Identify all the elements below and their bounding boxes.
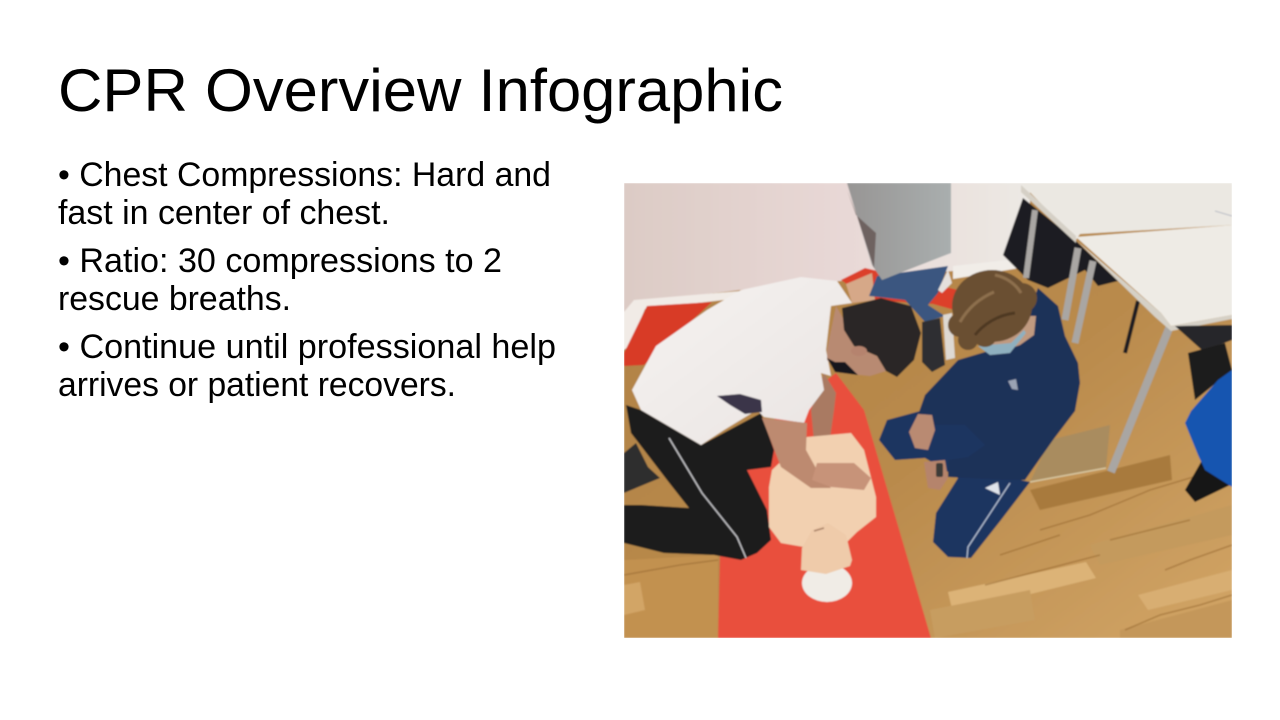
kneeling man in navy [879,270,1080,558]
face, mask and hair [992,314,1038,348]
far mat [624,302,712,366]
jacket on chair [1003,198,1118,288]
bullet: ratio: rescue breaths. [58,280,291,318]
table legs [1026,210,1170,472]
chair and bag at right [1175,325,1232,502]
bullet: ratio: • Ratio: 30 compressions to 2 [58,242,502,280]
shirt [632,277,852,445]
bullet: chest compressions [58,156,551,232]
floor [624,183,1232,638]
man in grey [847,183,955,372]
wall [624,183,1031,312]
bullet: chest compressions: fast in center of chest. [58,194,390,232]
baseboard [624,291,741,350]
trousers [879,410,1030,558]
man in white, doing compressions [624,277,921,560]
arm and hands on manikin [762,418,871,490]
manikin [769,433,876,602]
hands [909,414,935,450]
black trousers [624,405,774,560]
adidas logo [985,482,1000,495]
bullet: continue: arrives or patient recovers. [58,366,456,404]
title: CPR Overview Infographic [58,57,783,124]
hoodie [918,288,1080,480]
table tops [1021,183,1232,331]
bullet list [58,156,556,404]
bullet: ratio [58,242,502,318]
far manikin legs [846,273,875,303]
bullet: chest compressions: • Chest Compressions: Hard and [58,156,551,194]
far arm [810,374,836,437]
hair [842,298,921,377]
bullet: continue: • Continue until professional help [58,328,556,366]
photo: CPR training on a manikin [624,183,1232,638]
bullet: continue [58,328,556,404]
neck and face [827,306,886,376]
main mat [718,373,931,638]
